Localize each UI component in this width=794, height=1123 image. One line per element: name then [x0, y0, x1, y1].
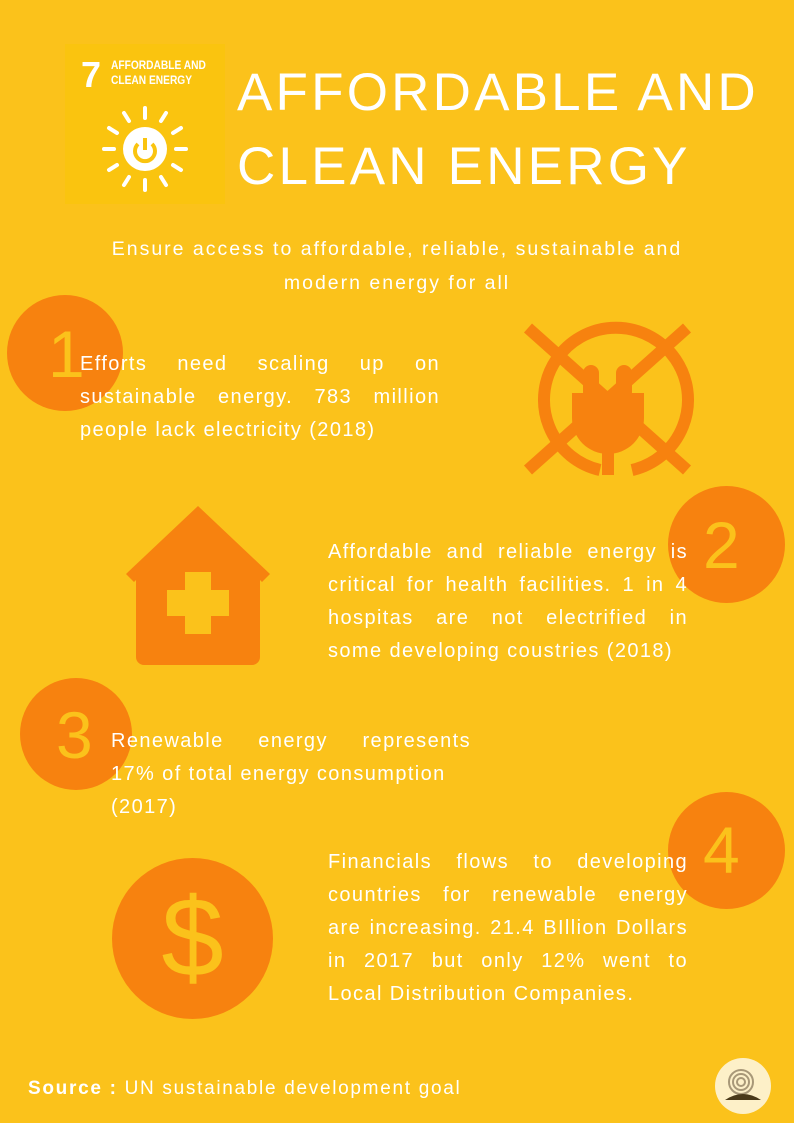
source: Source : UN sustainable development goal	[28, 1078, 461, 1099]
text 1: Efforts need scaling up on	[80, 353, 440, 375]
text 4: Local Distribution Companies.	[328, 983, 634, 1005]
subtitle: Ensure access to affordable, reliable, sustainable and	[112, 238, 682, 260]
logo text: AFFORDABLE AND	[111, 58, 206, 72]
icon: dollar coin: $	[161, 875, 224, 1000]
logo number: 7	[81, 54, 101, 95]
text 1	[80, 353, 440, 441]
text 2: some developing coustries (2018)	[328, 640, 673, 662]
text 2	[328, 541, 688, 662]
text 2: hospitas are not electrified in	[328, 607, 688, 629]
text 1: sustainable energy. 783 million	[80, 386, 440, 408]
circle 3	[20, 678, 132, 790]
subtitle: modern energy for all	[284, 272, 510, 294]
circle 4	[668, 792, 785, 909]
text 4: in 2017 but only 12% went to	[328, 950, 688, 972]
circle 2	[668, 486, 785, 603]
icon: hospital house	[126, 506, 270, 665]
number 1: 1	[48, 317, 85, 391]
text 2: Affordable and reliable energy is	[328, 541, 688, 563]
icon: no plug	[524, 322, 694, 476]
number 4: 4	[703, 813, 740, 887]
text 3: Renewable energy represents	[111, 730, 471, 752]
text 3: (2017)	[111, 796, 177, 818]
text 4: countries for renewable energy	[328, 884, 688, 906]
title	[237, 63, 759, 196]
number 3: 3	[56, 698, 93, 772]
text 3: 17% of total energy consumption	[111, 763, 446, 785]
text 4: Financials flows to developing	[328, 851, 688, 873]
logo text	[111, 58, 206, 87]
circle 1	[7, 295, 123, 411]
subtitle	[112, 238, 682, 294]
text 3	[111, 730, 471, 818]
text 1: people lack electricity (2018)	[80, 419, 375, 441]
text 4: are increasing. 21.4 BIllion Dollars	[328, 917, 688, 939]
title: AFFORDABLE AND	[237, 63, 759, 122]
icon: dollar coin	[112, 858, 273, 1019]
text 4	[328, 851, 688, 1005]
number 2: 2	[703, 508, 740, 582]
text 2: critical for health facilities. 1 in 4	[328, 574, 688, 596]
logo text: CLEAN ENERGY	[111, 73, 192, 87]
logo: bottom right	[715, 1058, 771, 1114]
logo: SDG 7	[65, 44, 225, 204]
icon: sun	[102, 106, 188, 192]
title: CLEAN ENERGY	[237, 137, 691, 196]
